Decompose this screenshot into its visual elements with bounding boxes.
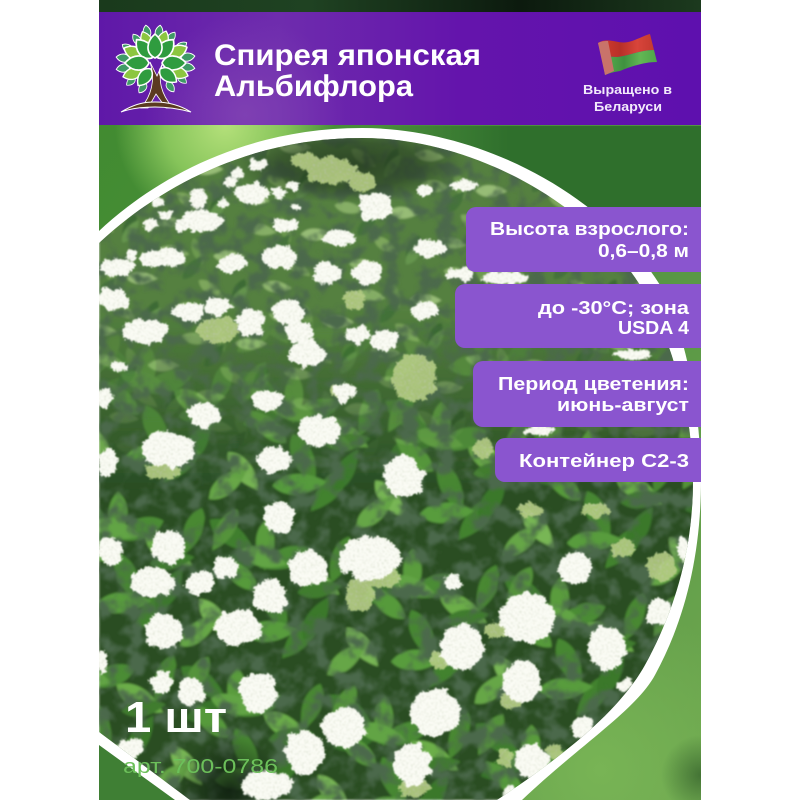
callout: height: Высота взрослого: xyxy=(490,218,689,239)
logo ground xyxy=(121,102,191,112)
photo: spirea shrub xyxy=(97,127,701,800)
callout: flowering period xyxy=(473,361,701,427)
title xyxy=(214,39,481,103)
icon: tree logo xyxy=(116,25,195,112)
origin label: Беларуси xyxy=(594,100,662,114)
photo frame: white arc border xyxy=(99,128,701,800)
callout: height xyxy=(466,207,701,272)
origin label: Выращено в xyxy=(583,83,672,97)
callout: container: Контейнер С2-3 xyxy=(519,450,689,471)
foliage xyxy=(99,127,701,800)
flower clusters xyxy=(97,159,688,800)
callout: flowering period: Период цветения: xyxy=(498,373,689,394)
callout: height: 0,6–0,8 м xyxy=(598,240,689,261)
article number: арт. 700-0786 xyxy=(123,756,278,778)
icon: Belarus flag xyxy=(598,34,657,75)
callout: frost hardiness: до -30°C; зона xyxy=(538,297,690,318)
panel: page background xyxy=(99,0,701,800)
logo trunk xyxy=(141,62,173,108)
header band xyxy=(99,12,701,125)
callout: container xyxy=(495,438,701,482)
logo leaves xyxy=(116,25,195,95)
callout: frost hardiness: USDA 4 xyxy=(618,317,690,338)
title: Альбифлора xyxy=(214,70,413,103)
flower buds xyxy=(144,152,677,797)
title: Спирея японская xyxy=(214,39,481,72)
callout: flowering period: июнь-август xyxy=(557,394,689,415)
infographic canvas xyxy=(99,0,701,800)
origin label xyxy=(583,83,672,114)
quantity label: 1 шт xyxy=(125,693,227,742)
callout: frost hardiness xyxy=(455,284,701,348)
